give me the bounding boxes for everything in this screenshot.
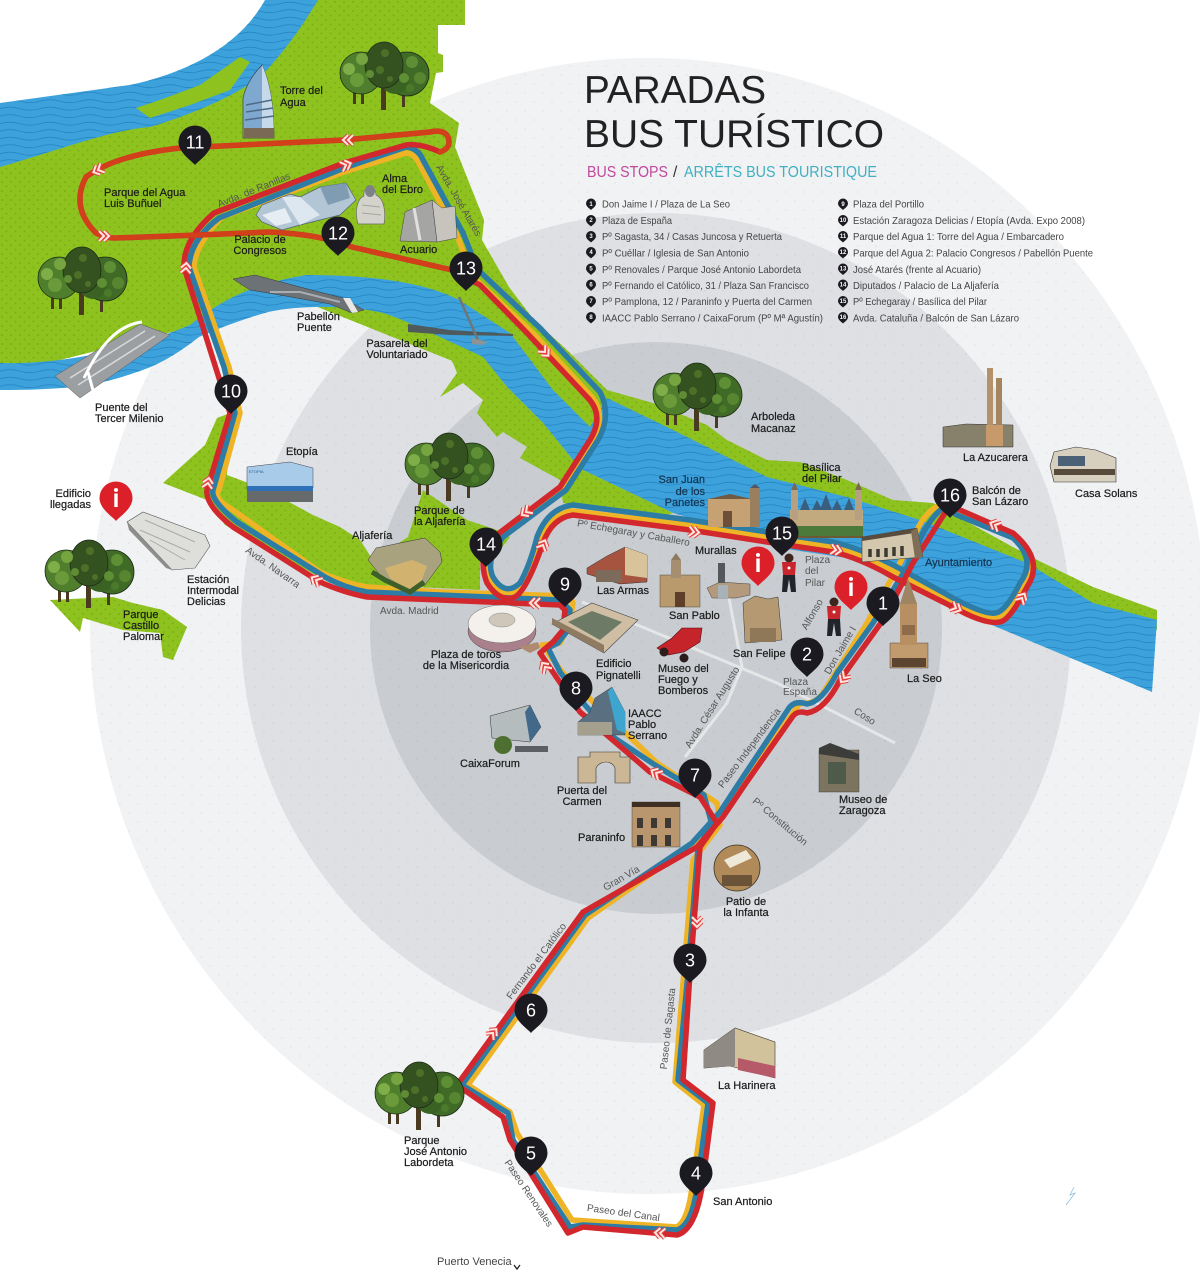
stop 6 [514,994,548,1033]
park: Parque del Agua and north bank [0,0,1157,630]
legend item 3: 3 [589,234,593,240]
route line: red [80,131,1033,1235]
street: Coso: Coso [852,706,878,728]
street: Pº Echegaray y Caballero: Pº Echegaray y Caballero [576,518,691,549]
icon: Museo de Zaragoza [819,743,859,792]
label: Basílica del Pilar: Basílica [802,462,841,474]
label: Estación Intermodal Delicias: Intermodal [187,585,239,597]
label: Parque de la Aljafería: la Aljafería [414,516,466,528]
legend item 15: 15 [840,299,847,305]
stop 5: 5 [526,1144,536,1164]
stop 9: 9 [560,574,570,594]
label: Pabellón Puente: Pabellón [297,311,340,323]
icon: Puente del Tercer Milenio [55,322,170,398]
title [584,69,884,156]
route line: yellow [194,153,1030,1227]
label: Basílica del Pilar: del Pilar [802,473,842,485]
label: Arboleda Macanaz: Macanaz [751,423,796,435]
street: Plaza del Pilar: Plaza [805,555,830,566]
park: river island [136,57,250,118]
legend item 16: 16 [840,315,847,321]
label: Paraninfo: Paraninfo [578,832,625,844]
label: Torre del Agua: Torre del [280,85,323,97]
label: Edificio Pignatelli: Pignatelli [596,670,641,682]
street: Avda. José Atarés: Avda. José Atarés [433,163,483,238]
street: Plaza del Pilar: Pilar [805,578,826,589]
label: San Felipe: San Felipe [733,648,786,660]
river: north branch [0,0,318,167]
icon: tree Parque de la Aljafería [405,433,494,501]
bus route: three coloured lines [80,131,1033,1235]
icon: Pasarela del Voluntariado [408,297,513,345]
legend item 4: Pº Cuéllar / Iglesia de San Antonio [602,248,749,260]
legend item 1: Don Jaime I / Plaza de La Seo [602,198,730,210]
label: Edificio Pignatelli: Edificio [596,658,631,670]
label: San Juan de los Panetes: San Juan [659,474,705,486]
subtitle: ARRÊTS BUS TOURISTIQUE [684,164,877,181]
icon: Casa Solans [1050,447,1116,482]
legend item 6: 6 [589,283,593,289]
label: San Pablo: San Pablo [669,610,720,622]
stop 1: 1 [878,594,888,614]
icon: Palacio de Congresos [256,183,356,230]
label: Museo del Fuego y Bomberos: Museo del [658,663,709,675]
icon: tree Castillo Palomar [45,540,134,608]
label: IAACC Pablo Serrano: Serrano [628,730,667,742]
park: Aljafería and Avda Navarra strip [163,413,510,590]
arrow: towards Puerto Venecia [514,1265,520,1269]
direction chevrons along the route [91,135,1029,1238]
label: Pasarela del Voluntariado: Pasarela del [366,338,428,350]
label: San Juan de los Panetes: de los [676,486,705,498]
icon: Museo del Fuego y Bomberos [657,628,702,662]
river and parks base map [0,0,1157,692]
stop 15: 15 [772,524,792,544]
label: La Seo: La Seo [907,673,942,685]
icon: Etopía [247,462,313,502]
stop 9 [548,568,582,607]
street: Alfonso: Alfonso [800,597,826,632]
label: IAACC Pablo Serrano: Pablo [628,719,656,731]
icon: La Harinera [704,1028,775,1078]
label: Puerta del Carmen: Carmen [562,796,602,808]
legend item 13: 13 [840,267,847,273]
icon: La Azucarera [943,368,1013,447]
street: Avda. Madrid: Avda. Madrid [380,606,439,617]
stop 3: 3 [685,950,695,970]
icon: tourist information Plaza del Pilar [742,546,774,586]
label: San Juan de los Panetes: Panetes [665,497,705,509]
stop 5 [514,1136,548,1176]
icon: Pabellón Puente [233,275,364,313]
icon: IAACC Pablo Serrano [578,687,625,735]
label: Parque José Antonio Labordeta: Parque [404,1135,439,1147]
icon: Etopía: ETOPIA [249,469,264,474]
stop 14: 14 [476,534,496,554]
label: Puente del Tercer Milenio: Tercer Milenio [95,413,163,425]
icon: Las Armas [587,547,647,584]
label: Museo del Fuego y Bomberos: Bomberos [658,685,709,697]
legend item 3: Pº Sagasta, 34 / Casas Juncosa y Retuerta [602,231,782,243]
label: Museo de Zaragoza: Zaragoza [839,805,886,817]
stop 3 [674,944,706,983]
street: Fernando el Católico: Fernando el Católico [505,921,569,1002]
legend of stops [586,198,1093,324]
street: Paseo Independencia: Paseo Independencia [716,706,784,790]
label: IAACC Pablo Serrano: IAACC [628,708,662,720]
label: La Azucarera: La Azucarera [963,452,1029,464]
stop 6: 6 [526,1000,536,1020]
legend item 5: 5 [589,267,593,273]
label: Palacio de Congresos: Palacio de [234,234,286,246]
label: CaixaForum: CaixaForum [460,758,520,770]
icon: Patio de la Infanta [714,845,760,891]
icon: San Juan de los Panetes [708,484,760,527]
subtitle [587,164,877,181]
icon: Edificio Pignatelli [552,603,638,653]
stop 8 [560,672,592,711]
place labels [50,85,1138,1208]
legend item 2: 2 [589,218,593,224]
stop 10: 10 [221,382,241,402]
legend item 11: Parque del Agua 1: Torre del Agua / Embarcadero [853,231,1064,243]
legend item 14: 14 [840,283,847,289]
street: Plaza España: España [783,687,817,698]
icon: tree Parque Labordeta [375,1062,464,1130]
title: BUS TURÍSTICO [584,113,884,156]
legend item 7: Pº Pamplona, 12 / Paraninfo y Puerta del Carmen [602,296,812,308]
icon: Palacio de la Aljafería [368,538,442,592]
street: Paseo de Sagasta: Paseo de Sagasta [659,987,678,1070]
legend item 10: 10 [840,218,847,224]
label: Parque del Agua: Luis Buñuel [104,198,162,210]
label: Estación Intermodal Delicias: Delicias [187,596,226,608]
label: Patio de la Infanta: la Infanta [723,907,770,919]
stop markers [178,126,966,1196]
icon: Murallas y estatua [707,563,750,598]
label: Plaza de toros de la Misericordia: de la Misericordia [423,660,510,672]
label: Puente del Tercer Milenio: Puente del [95,402,148,414]
stop 15 [766,516,798,556]
legend item 7: 7 [589,299,593,305]
legend item 8: 8 [589,315,593,321]
label: Parque de la Aljafería: Parque de [414,505,465,517]
label: Parque Castillo Palomar: Palomar [123,631,164,643]
label: Parque José Antonio Labordeta: José Antonio [404,1146,467,1158]
icon: Torre del Agua [243,65,274,138]
legend item 12: Parque del Agua 2: Palacio Congresos / Pabellón Puente [853,248,1093,260]
legend item 2: Plaza de España [602,215,672,227]
park: Parque Castillo Palomar [50,597,187,660]
legend item 10: Estación Zaragoza Delicias / Etopía (Avda. Expo 2008) [853,215,1085,227]
icon: guide person Plaza del Pilar [782,554,796,592]
route line: blue [189,147,1027,1230]
label: San Antonio: San Antonio [713,1196,772,1208]
label: Ayuntamiento: Ayuntamiento [925,557,992,569]
label: Pasarela del Voluntariado: Voluntariado [366,349,428,361]
legend item 9: Plaza del Portillo [853,198,924,210]
label: Palacio de Congresos: Congresos [233,245,287,257]
icon: La Seo [890,578,928,668]
icon: Paraninfo [632,802,680,847]
label: Torre del Agua: Agua [280,97,307,109]
icon: tree Arboleda Macanaz [653,363,742,431]
street: Avda. de Ranillas: Avda. de Ranillas [216,171,292,210]
street: Pº Constitución: Pº Constitución [750,796,809,848]
legend item 1: 1 [589,202,593,208]
icon: Alma del Ebro [356,185,385,224]
icon: Plaza de toros de la Misericordia [468,605,540,653]
title: PARADAS [584,69,766,112]
label: Museo de Zaragoza: Museo de [839,794,887,806]
stop 7: 7 [690,766,700,786]
label: Acuario: Acuario [400,244,437,256]
city streets [582,587,895,757]
label: Etopía: Etopía [286,446,319,458]
route line: Parque del Agua loop [80,131,452,270]
legend item 15: Pº Echegaray / Basílica del Pilar [853,296,987,308]
stop 16 [934,478,966,518]
label: Las Armas: Las Armas [597,585,649,597]
stop 8: 8 [571,678,581,698]
label: Parque Castillo Palomar: Castillo [123,620,159,632]
stop 12: 12 [328,224,348,244]
street: Don Jaime I: Don Jaime I [823,625,859,677]
icon: tree Parque del Agua south [38,247,127,315]
icon: Acuario [400,200,457,242]
label: Balcón de San Lázaro: Balcón de [972,485,1021,497]
icon: tourist information Edificio llegadas [100,482,132,521]
label: Alma del Ebro: Alma [382,173,408,185]
legend item 16: Avda. Cataluña / Balcón de San Lázaro [853,312,1019,324]
label: Parque Castillo Palomar: Parque [123,609,158,621]
legend item 12: 12 [840,250,847,256]
stop 11: 11 [186,132,204,152]
label: Puerta del Carmen: Puerta del [557,785,607,797]
street: Avda. Navarra: Avda. Navarra [243,545,302,591]
icon: tourist information Don Jaime [834,570,868,610]
label: Balcón de San Lázaro: San Lázaro [972,496,1028,508]
street: Avda. César Augusto: Avda. César Augusto [683,665,743,750]
legend item 13: José Atarés (frente al Acuario) [853,264,981,276]
legend item 8: IAACC Pablo Serrano / CaixaForum (Pº Mª Agustín) [602,312,823,324]
street: Plaza del Pilar: del [805,566,818,577]
stop 13: 13 [456,258,476,278]
stop 2: 2 [802,644,812,664]
street: Paseo del Canal: Paseo del Canal [586,1203,660,1224]
legend item 5: Pº Renovales / Parque José Antonio Labordeta [602,264,801,276]
street: Puerto Venecia: Puerto Venecia [437,1256,512,1268]
park: south bank [437,337,673,515]
stop 16: 16 [940,486,960,506]
label: Alma del Ebro: del Ebro [382,184,423,196]
label: Plaza de toros de la Misericordia: Plaza de toros [431,649,502,661]
label: Museo del Fuego y Bomberos: Fuego y [658,674,698,686]
street: Plaza España: Plaza [783,677,808,688]
stop 10 [214,374,248,414]
legend item 4: 4 [589,250,593,256]
subtitle: / [673,164,678,181]
label: Parque del Agua: Parque del Agua [104,187,186,199]
label: Parque José Antonio Labordeta: Labordeta [404,1157,454,1169]
street: Paseo Renovales: Paseo Renovales [502,1158,555,1229]
icon: San Felipe [743,596,782,643]
icon: San Pablo [660,553,700,607]
stop 2 [790,638,824,677]
legend item 11: 11 [840,234,847,240]
label: Murallas: Murallas [695,545,737,557]
stop 4: 4 [691,1164,701,1184]
label: Aljafería: Aljafería [352,530,393,542]
subtitle: BUS STOPS [587,164,668,181]
label: Edificio llegadas: Edificio [56,488,91,500]
label: Patio de la Infanta: Patio de [726,896,766,908]
stop 4 [680,1156,712,1196]
river: Ebro [0,275,1157,692]
decorative mark bottom right [1066,1187,1075,1205]
icon: Estación Intermodal Delicias [127,512,210,570]
legend item 6: Pº Fernando el Católico, 31 / Plaza San Francisco [602,280,809,292]
label: Estación Intermodal Delicias: Estación [187,574,229,586]
legend item 9: 9 [841,202,845,208]
icon: Ayuntamiento [862,528,923,562]
label: Casa Solans: Casa Solans [1075,488,1138,500]
stop 14 [470,528,502,567]
stop 12 [322,216,354,256]
icon: Basílica del Pilar [790,482,863,538]
stop 1 [866,586,900,626]
label: La Harinera: La Harinera [718,1080,776,1092]
icon: CaixaForum [490,705,548,754]
street names [216,163,878,1269]
label: Edificio llegadas: llegadas [50,499,91,511]
icon: Puerta del Carmen [578,752,630,783]
icon: tree Parque del Agua north [340,42,429,110]
label: Pabellón Puente: Puente [297,322,332,334]
street: Gran Vía: Gran Vía [602,864,642,894]
stop 11 [178,126,212,165]
legend item 14: Diputados / Palacio de La Aljafería [853,280,999,292]
label: Arboleda Macanaz: Arboleda [751,411,796,423]
icon: guide person Alfonso [827,598,841,636]
stop 7 [678,758,712,798]
stop 13 [450,252,482,291]
